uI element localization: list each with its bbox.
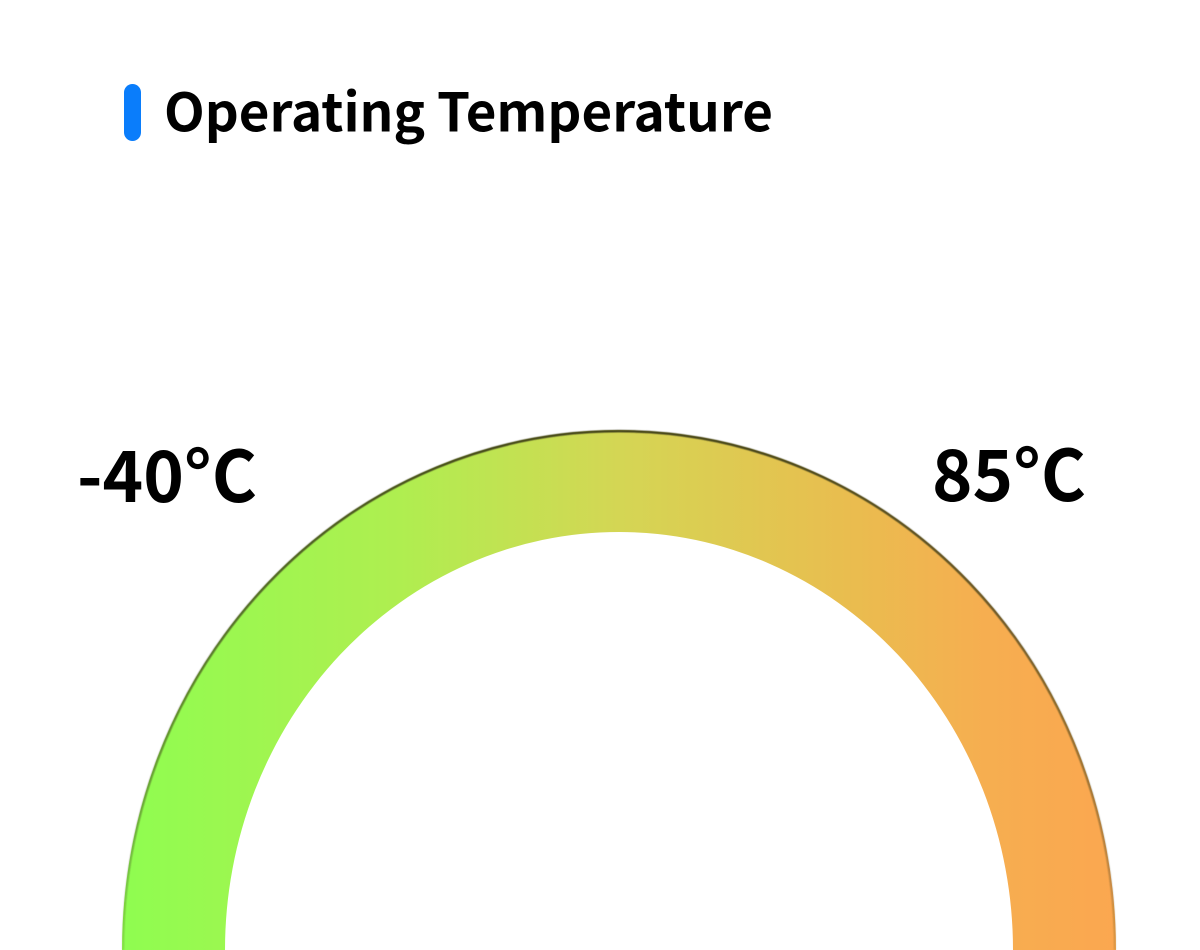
maximum temperature label: 85°C — [932, 420, 1086, 522]
title: Operating Temperature — [164, 72, 773, 148]
minimum temperature label: -40°C — [77, 421, 257, 523]
temperature gauge arc — [122, 430, 1116, 950]
title accent bar — [124, 84, 141, 141]
